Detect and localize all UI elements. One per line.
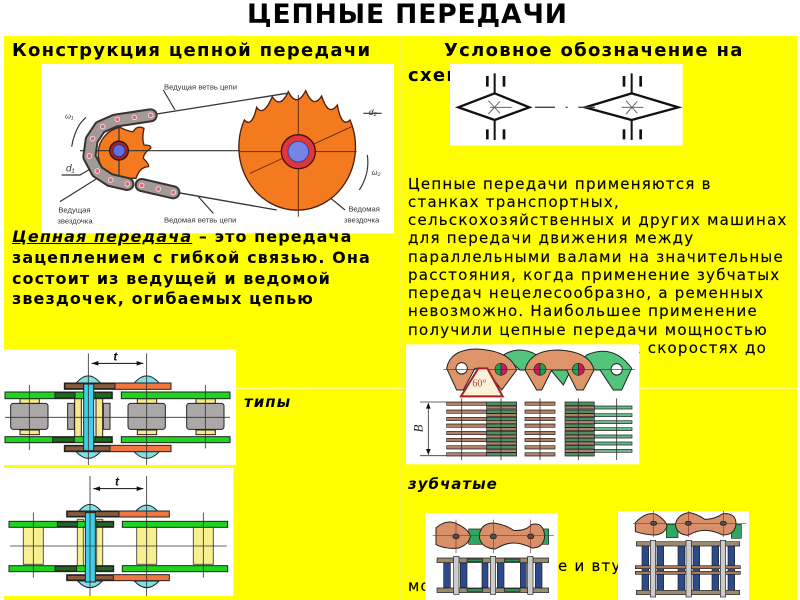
diagram: schematic symbol bbox=[450, 64, 683, 146]
definition text: звездочек, огибаемых цепью bbox=[12, 289, 314, 308]
diagram labels: d₁ bbox=[66, 164, 75, 175]
definition text bbox=[12, 227, 371, 308]
diagram labels: ω₂ bbox=[372, 168, 381, 177]
application text: параллельными валами на значительные bbox=[408, 248, 784, 266]
heading: symbol: Условное обозначение на bbox=[444, 40, 744, 61]
diagram: roller chain: t bbox=[113, 350, 118, 364]
diagram: bush chain bbox=[4, 468, 234, 596]
diagram labels: ω₁ bbox=[65, 111, 74, 120]
application text: сельскохозяйственных и других машинах bbox=[408, 211, 788, 229]
diagram labels: Ведущая bbox=[58, 205, 91, 214]
application text: Цепные передачи применяются в bbox=[408, 175, 712, 193]
diagram: toothed chain: B bbox=[412, 424, 426, 432]
diagram labels: звездочка bbox=[57, 216, 93, 225]
label: toothed: зубчатые bbox=[408, 475, 498, 493]
diagram: chain left bottom bbox=[425, 513, 558, 600]
diagram: bush chain: t bbox=[115, 474, 120, 488]
heading continuation: схеме bbox=[408, 65, 476, 86]
diagram labels: Ведущая ветвь цепи bbox=[164, 82, 237, 91]
diagram labels: d₂ bbox=[369, 107, 377, 117]
application text: станках транспортных, bbox=[408, 193, 620, 211]
diagram: chain drive construction bbox=[42, 64, 394, 234]
horizontal cell divider bbox=[4, 388, 797, 389]
diagram: roller chain bbox=[4, 349, 236, 465]
large sprocket bbox=[239, 91, 357, 217]
text fragment: е и втулочные bbox=[558, 557, 688, 575]
diagram: chain right bottom bbox=[618, 511, 749, 600]
diagram: toothed chain bbox=[406, 344, 640, 464]
definition text: состоит из ведущей и ведомой bbox=[12, 269, 331, 288]
application text: расстояния, когда применение зубчатых bbox=[408, 266, 780, 284]
application text: невозможно. Наибольшее применение bbox=[408, 302, 758, 320]
application text: к скоростях до bbox=[631, 339, 767, 357]
chain bbox=[87, 113, 176, 195]
text fragment: мо bbox=[408, 577, 431, 595]
definition text: зацеплением с гибкой связью. Она bbox=[12, 248, 371, 267]
diagram: toothed chain: 60° bbox=[472, 379, 486, 390]
heading: construction: Конструкция цепной передачи bbox=[12, 40, 371, 61]
definition text: Цепная передача – это передача bbox=[12, 227, 352, 246]
diagram labels: звездочка bbox=[344, 216, 380, 225]
diagram labels: Ведомая bbox=[348, 205, 380, 214]
application text: для передачи движения между bbox=[408, 229, 694, 247]
application text bbox=[408, 175, 788, 357]
application text: получили цепные передачи мощностью bbox=[408, 321, 768, 339]
label: types: типы bbox=[244, 393, 291, 411]
small sprocket bbox=[80, 120, 240, 180]
diagram labels bbox=[57, 82, 381, 225]
diagram labels: Ведомая ветвь цепи bbox=[164, 215, 236, 224]
vertical cell divider bbox=[400, 36, 402, 600]
application text: передач нецелесообразно, а ременных bbox=[408, 284, 764, 302]
